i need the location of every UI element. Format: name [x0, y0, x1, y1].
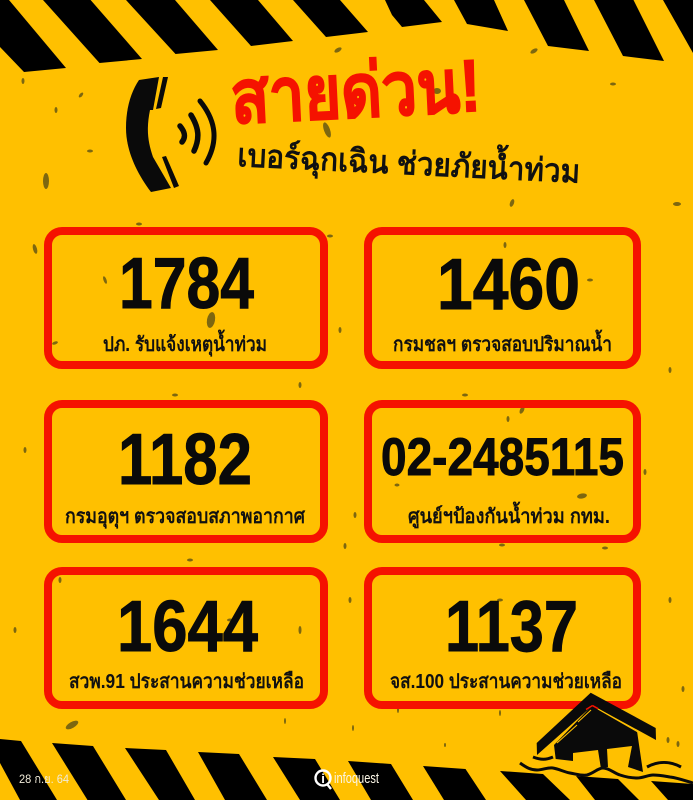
label: 1137: จส.100 ประสานความช่วยเหลือ	[390, 670, 622, 693]
number: 1137: 1137	[445, 587, 578, 667]
panel: 1644	[48, 571, 324, 705]
panel: 02-2485115	[368, 404, 637, 539]
number: 1182: 1182	[118, 420, 252, 500]
panel: 1460	[368, 231, 637, 365]
title: สายด่วน!	[229, 44, 482, 139]
icon: telephone handset with sound waves	[126, 77, 214, 192]
label: 02-2485115: ศูนย์ฯป้องกันน้ำท่วม กทม.	[408, 501, 610, 530]
panel: 1784	[48, 231, 324, 365]
label: 1644: สวพ.91 ประสานความช่วยเหลือ	[69, 670, 304, 693]
number: 1644: 1644	[117, 587, 258, 667]
logo: infoquest: infoquest	[334, 770, 380, 787]
number: 02-2485115: 02-2485115	[381, 428, 624, 487]
label: 1182: กรมอุตุฯ ตรวจสอบสภาพอากาศ	[65, 506, 306, 529]
logo: infoquest: i	[321, 771, 325, 786]
subtitle: เบอร์ฉุกเฉิน ช่วยภัยน้ำท่วม	[237, 131, 581, 193]
icon: flooded house	[520, 693, 693, 783]
hazard stripes: bottom	[0, 739, 693, 800]
hazard stripes: top	[0, 0, 693, 72]
panel: 1137	[368, 571, 637, 705]
panel: 1182	[48, 404, 324, 539]
label: 1784: ปภ. รับแจ้งเหตุน้ำท่วม	[103, 329, 267, 357]
logo: infoquest	[316, 770, 380, 789]
number: 1460: 1460	[437, 245, 580, 325]
label: 1460: กรมชลฯ ตรวจสอบปริมาณน้ำ	[393, 329, 612, 356]
date: 28 ก.ย. 64	[19, 772, 69, 786]
number: 1784: 1784	[119, 244, 254, 324]
